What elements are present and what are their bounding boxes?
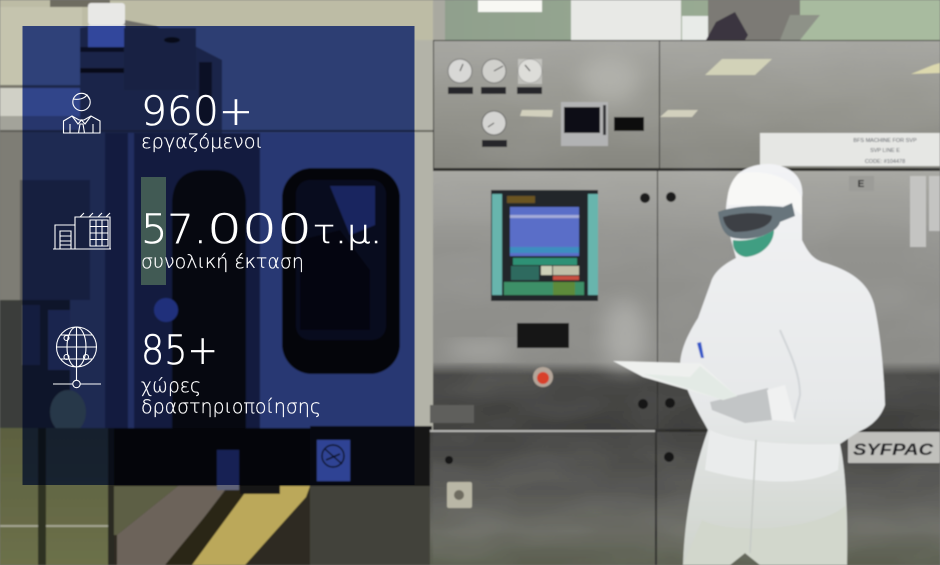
SYFPAC plate: SYFPAC — [853, 440, 934, 459]
label: employees: εργαζόμενοι — [141, 132, 263, 153]
number: 57.000 square metres: 57. — [141, 207, 207, 253]
machine sign: CODE: #104478 — [865, 159, 905, 165]
gauges and control devices — [445, 59, 676, 508]
SYFPAC plate — [848, 432, 940, 463]
label: total area: συνολική έκταση — [141, 252, 304, 273]
label: countries: χώρες — [141, 376, 201, 397]
stainless steel panels — [430, 40, 940, 565]
stat: countries of activity — [53, 327, 321, 418]
machine sign: SVP LINE E — [870, 148, 900, 154]
notebook and pen — [613, 342, 737, 400]
number: 960+: 960+ — [141, 89, 253, 135]
technician in clean-room suit — [613, 164, 885, 565]
translucent blue stats panel — [22, 26, 414, 485]
machine sign: BFS MACHINE FOR SVP — [853, 138, 917, 144]
warning label seen through panel — [141, 177, 166, 285]
machine sign: E — [858, 179, 865, 190]
ceiling area — [433, 0, 940, 41]
stat: employees — [64, 89, 263, 153]
glove and cuff — [710, 385, 795, 423]
goggles and mask — [718, 203, 795, 257]
left wall and machine — [0, 0, 436, 565]
number: 57.000 square metres — [141, 207, 382, 253]
touch control panel — [491, 190, 598, 301]
machine sign — [760, 133, 940, 247]
number: 85+: 85+ — [141, 328, 218, 374]
number: 57.000 square metres: 000 — [207, 207, 312, 253]
label: of activity: δραστηριοποίησης — [141, 397, 321, 418]
stat: total area — [53, 207, 382, 273]
icon: factory — [53, 213, 111, 249]
icon: employee — [64, 93, 100, 133]
number: 57.000 square metres: τ.μ. — [313, 212, 382, 251]
icon: globe network — [53, 327, 101, 388]
